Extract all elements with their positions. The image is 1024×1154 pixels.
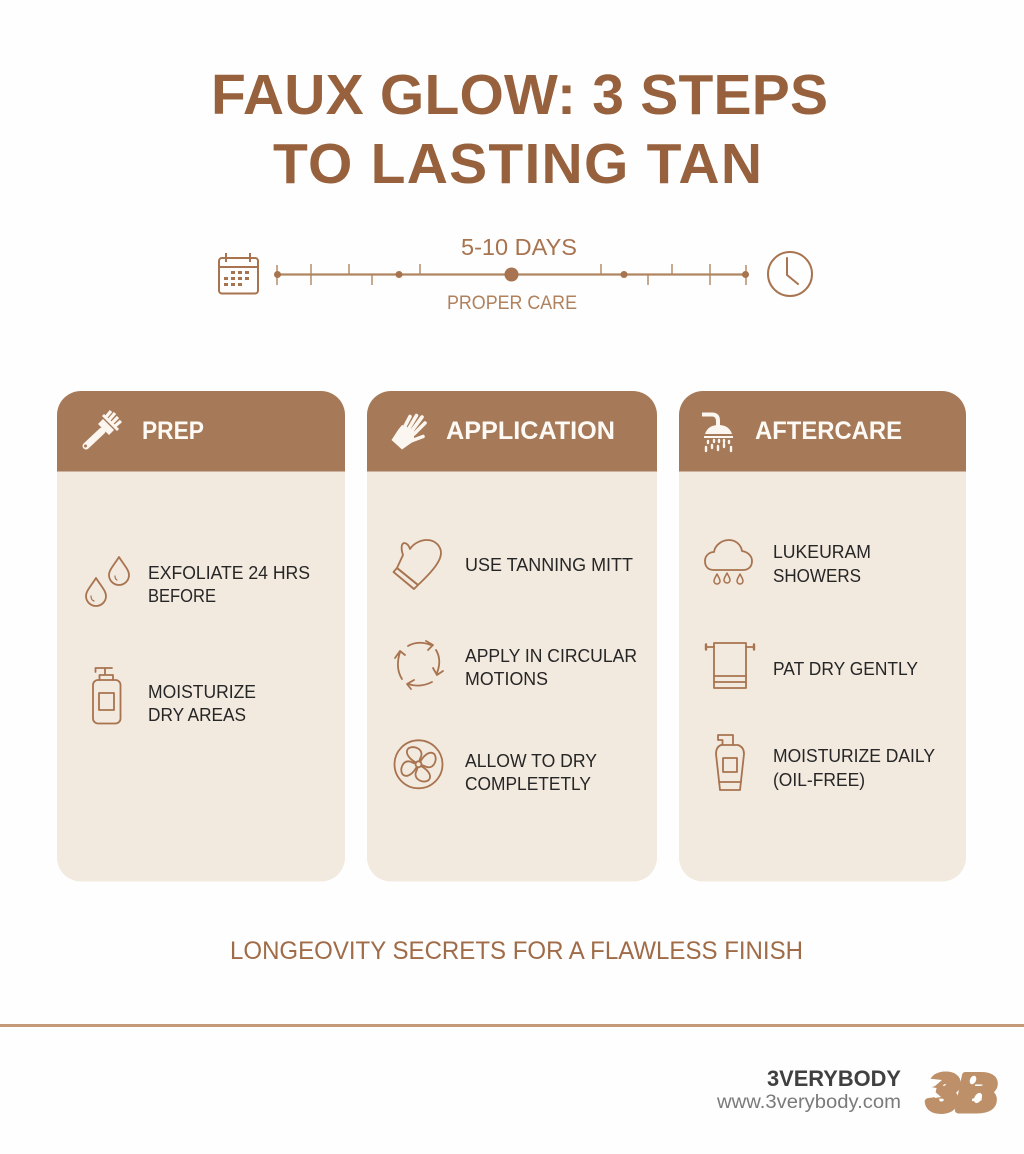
brand name: 3VERYBODY xyxy=(767,1066,901,1091)
panel: aftercare xyxy=(679,391,966,882)
icon: calendar xyxy=(219,253,258,294)
aftercare heading: AFTERCARE xyxy=(755,417,902,445)
timeline sublabel: PROPER CARE xyxy=(447,293,577,314)
exfoliate text xyxy=(148,562,310,606)
daily text xyxy=(773,745,935,790)
icon: hand xyxy=(392,416,425,450)
icon: cloud xyxy=(705,540,752,584)
icon: fan xyxy=(394,740,442,788)
daily text: (OIL-FREE) xyxy=(773,769,865,790)
footer rule xyxy=(0,1024,1024,1027)
icon: lotion tube xyxy=(716,735,744,790)
prep heading: PREP xyxy=(142,417,204,445)
moisturize text: MOISTURIZE xyxy=(148,681,256,702)
daily text: MOISTURIZE DAILY xyxy=(773,745,935,766)
mitt text: USE TANNING MITT xyxy=(465,554,633,575)
timeline xyxy=(219,234,812,314)
exfoliate text: BEFORE xyxy=(148,585,216,606)
timeline track xyxy=(274,264,749,285)
timeline duration label: 5-10 DAYS xyxy=(461,234,577,260)
icon: shower xyxy=(702,414,733,451)
icon: circular arrows xyxy=(395,641,443,689)
circular text xyxy=(465,645,637,689)
dry text xyxy=(465,750,597,794)
icon: brush xyxy=(84,411,121,448)
icon: pump bottle xyxy=(93,668,120,724)
logo: 3B xyxy=(928,1065,996,1121)
title: TO LASTING TAN xyxy=(273,132,762,196)
circular text: MOTIONS xyxy=(465,668,548,689)
icon: clock xyxy=(768,252,812,296)
moisturize text: DRY AREAS xyxy=(148,704,246,725)
tagline: LONGEOVITY SECRETS FOR A FLAWLESS FINISH xyxy=(230,937,803,965)
icon: towel xyxy=(706,643,754,688)
aftercare header xyxy=(679,391,966,472)
showers text: LUKEURAM xyxy=(773,541,871,562)
brand url: www.3verybody.com xyxy=(716,1092,901,1113)
moisturize text xyxy=(148,681,256,725)
showers text xyxy=(773,541,871,586)
dry text: COMPLETETLY xyxy=(465,773,591,794)
icon: mitt xyxy=(394,540,441,589)
circular text: APPLY IN CIRCULAR xyxy=(465,645,637,666)
application heading: APPLICATION xyxy=(446,417,615,445)
towel text: PAT DRY GENTLY xyxy=(773,658,918,679)
title: FAUX GLOW: 3 STEPS xyxy=(211,63,828,127)
title xyxy=(211,63,828,196)
icon: water drops xyxy=(86,557,129,606)
panel: application xyxy=(367,391,657,882)
exfoliate text: EXFOLIATE 24 HRS xyxy=(148,562,310,583)
showers text: SHOWERS xyxy=(773,565,861,586)
application header xyxy=(367,391,657,472)
dry text: ALLOW TO DRY xyxy=(465,750,597,771)
panel: prep xyxy=(57,391,345,882)
footer brand xyxy=(716,1065,996,1121)
prep header xyxy=(57,391,345,472)
